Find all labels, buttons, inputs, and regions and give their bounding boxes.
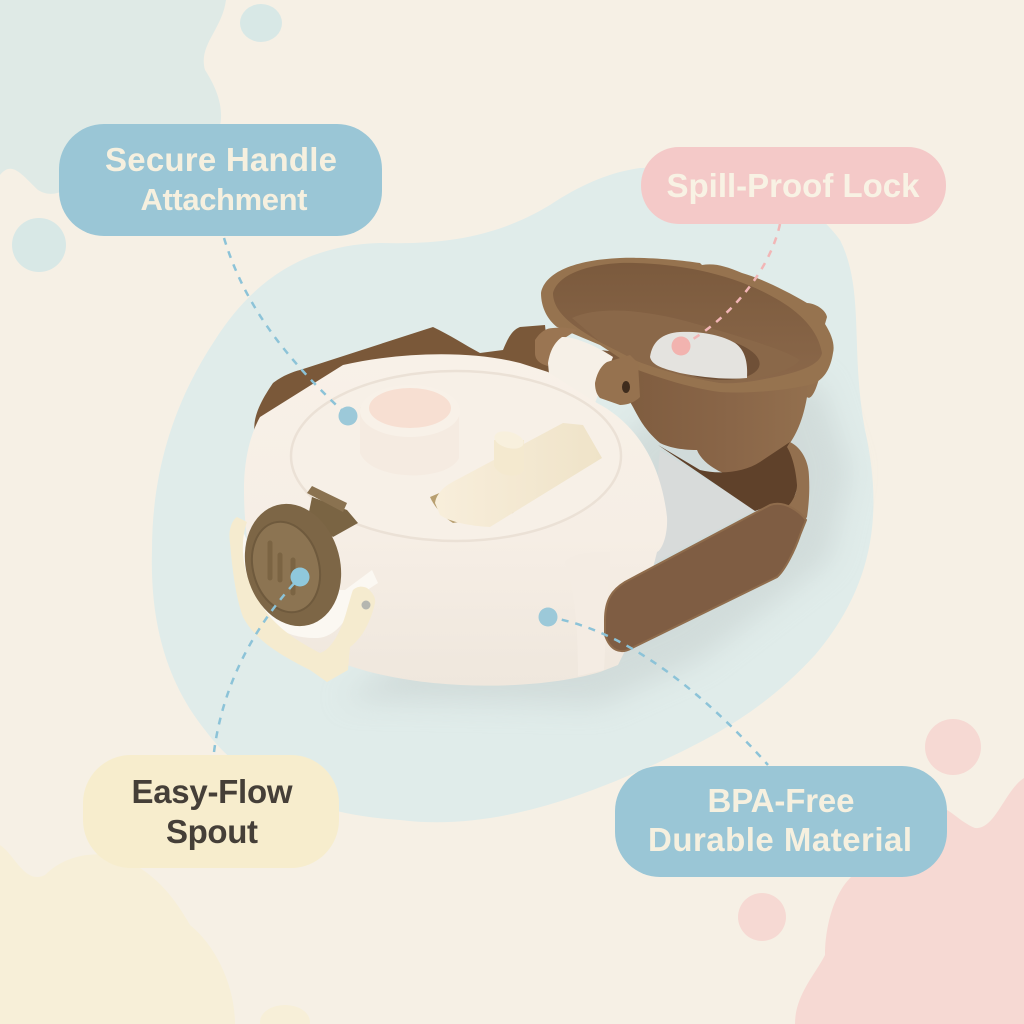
rear handle arm (254, 325, 550, 437)
cup inner floor (572, 311, 800, 383)
label: Secure Handle Attachment (59, 124, 382, 236)
silicone seal (650, 332, 747, 379)
decorative dot: left teal (12, 218, 66, 272)
handle inner dark side (658, 442, 800, 511)
decorative dot: right pink (925, 719, 981, 775)
label: Secure Handle Attachment: Secure Handle (105, 141, 337, 178)
leader line: spout (214, 577, 300, 752)
white guard (240, 525, 378, 638)
cup rim (541, 258, 834, 393)
lid top plate (291, 371, 621, 541)
cup outer body (600, 350, 820, 475)
label: Easy-Flow Spout: Easy-Flow (132, 773, 293, 810)
cast shadow (340, 380, 850, 705)
slider opening (430, 480, 520, 523)
clip pin (362, 600, 370, 610)
cup interior (553, 263, 822, 383)
label: Secure Handle Attachment: Attachment (140, 182, 308, 217)
decorative blob: centre (152, 168, 873, 822)
decorative blob: bottom right (795, 778, 1024, 1024)
leader line: lock (681, 224, 780, 346)
leader line: handle (224, 238, 348, 416)
open cap cup (535, 258, 834, 475)
spout cap latch (307, 486, 358, 537)
leader line: material (548, 617, 768, 765)
marker: material (538, 608, 558, 626)
label: Spill-Proof Lock (641, 147, 946, 224)
spout cap (232, 493, 354, 637)
spout cap face (242, 514, 330, 620)
front handle arm (605, 504, 806, 651)
label: Easy-Flow Spout (83, 755, 339, 868)
marker: lock (672, 336, 690, 356)
decorative dot: lower pink (738, 893, 786, 941)
marker: handle (338, 406, 358, 426)
hinge right knob (595, 355, 640, 405)
slider peg (492, 428, 526, 476)
hinge pin hole (622, 381, 630, 393)
decorative dot: top teal (240, 4, 282, 42)
slider (435, 423, 602, 527)
decorative blob: bottom left (0, 845, 235, 1024)
seal recess (658, 330, 762, 386)
product illustration: bottle lid (229, 258, 850, 705)
spout cap ridges (270, 543, 293, 593)
hinge left knob (535, 328, 577, 366)
side clip (229, 517, 375, 682)
label: BPA-Free Durable Material: Durable Material (648, 821, 912, 858)
label: BPA-Free Durable Material: BPA-Free (708, 782, 854, 819)
label: Easy-Flow Spout: Spout (166, 813, 258, 850)
lid shoulder rib (565, 552, 610, 676)
decorative blob: top left (0, 0, 226, 194)
floor shadow between lid and arm (650, 450, 755, 565)
marker: spout (290, 568, 310, 586)
handle right end rim (786, 442, 809, 540)
label: Spill-Proof Lock: Spill-Proof Lock (666, 167, 920, 204)
hinge white block (548, 337, 613, 403)
lid body (244, 354, 667, 686)
spout ring (360, 385, 460, 475)
decorative blob: bottom centre (260, 1005, 310, 1024)
label: BPA-Free Durable Material (615, 766, 947, 877)
